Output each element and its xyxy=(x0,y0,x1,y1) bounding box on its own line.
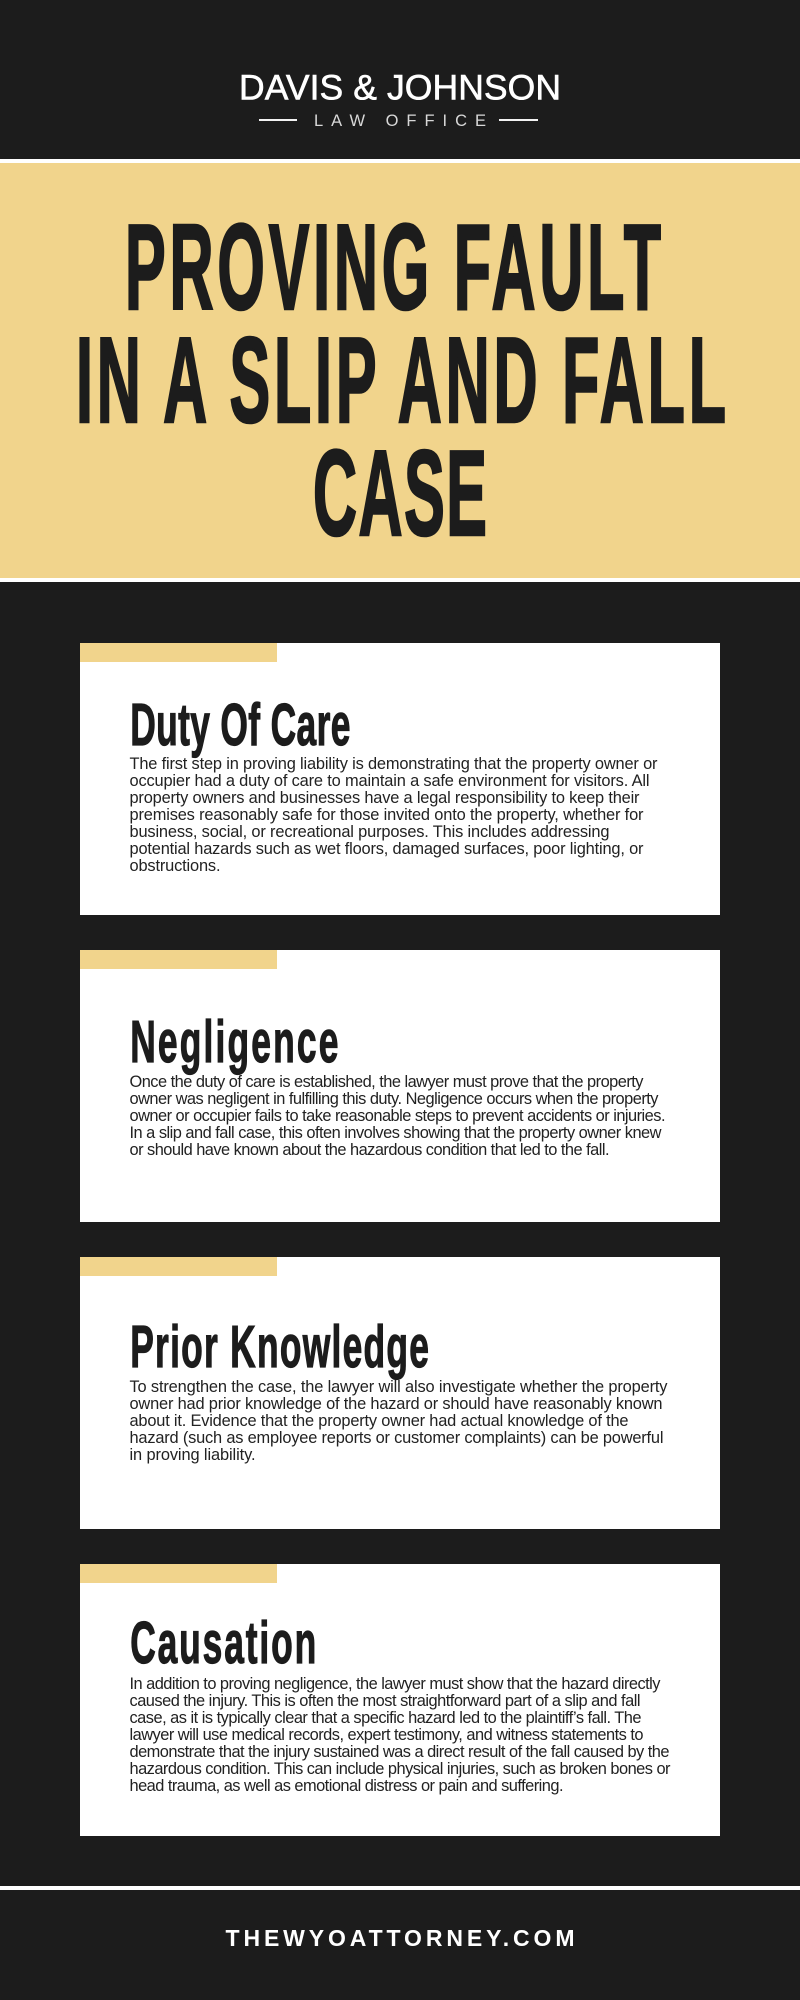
text: prior knowledge body: about it. Evidence that the property owner had actual knowledge of the xyxy=(130,1412,628,1430)
footer xyxy=(0,1886,800,1951)
heading: negligence: Negligence xyxy=(130,1010,338,1075)
text: duty of care body: The first step in proving liability is demonstrating that the property owner or xyxy=(130,755,658,773)
logo: Davis & Johnson Law Office: DAVIS & JOHNSON xyxy=(239,68,561,108)
logo: Davis & Johnson Law Office: LAW OFFICE xyxy=(314,112,486,130)
text: negligence body: owner or occupier fails to take reasonable steps to prevent accidents or injuries. xyxy=(130,1107,666,1125)
text: prior knowledge body: To strengthen the case, the lawyer will also investigate whether the property xyxy=(130,1378,668,1396)
title heading: IN A SLIP AND FALL xyxy=(76,313,726,449)
panel: negligence xyxy=(80,950,720,1222)
text: causation body: case, as it is typically clear that a specific hazard led to the plaintiff’s fall. The xyxy=(130,1709,642,1727)
text: causation body xyxy=(130,1675,671,1795)
text: causation body: demonstrate that the injury sustained was a direct result of the fall caused by the xyxy=(130,1743,670,1761)
text: duty of care body xyxy=(130,755,658,875)
title heading: PROVING FAULT xyxy=(125,200,661,336)
text: duty of care body: premises reasonably safe for those invited onto the property, whether for xyxy=(130,806,644,824)
text: prior knowledge body: owner had prior knowledge of the hazard or should have reasonably known xyxy=(130,1395,662,1413)
text: negligence body: owner was negligent in fulfilling this duty. Negligence occurs when the property xyxy=(130,1090,659,1108)
text: causation body: head trauma, as well as emotional distress or pain and suffering. xyxy=(130,1777,564,1795)
text: prior knowledge body xyxy=(130,1378,668,1464)
text: duty of care body: occupier had a duty of care to maintain a safe environment for visitors. All xyxy=(130,772,650,790)
title heading: CASE xyxy=(313,426,487,562)
text: negligence body: Once the duty of care is established, the lawyer must prove that the property xyxy=(130,1073,644,1091)
title band xyxy=(0,159,800,582)
text: prior knowledge body: hazard (such as employee reports or customer complaints) can be powerful xyxy=(130,1429,664,1447)
text: negligence body xyxy=(130,1073,666,1159)
heading: duty of care: Duty Of Care xyxy=(130,693,350,758)
logo: Davis & Johnson Law Office xyxy=(239,68,561,130)
text: causation body: caused the injury. This is often the most straightforward part of a slip and fall xyxy=(130,1692,640,1710)
text: duty of care body: obstructions. xyxy=(130,857,220,875)
panel: duty of care xyxy=(80,643,720,915)
text: causation body: In addition to proving negligence, the lawyer must show that the hazard directly xyxy=(130,1675,661,1693)
panel: causation xyxy=(80,1564,720,1836)
text: negligence body: In a slip and fall case, this often involves showing that the property owner knew xyxy=(130,1124,662,1142)
text: duty of care body: business, social, or recreational purposes. This includes addressing xyxy=(130,823,610,841)
text: duty of care body: property owners and businesses have a legal responsibility to keep their xyxy=(130,789,640,807)
text: negligence body: or should have known about the hazardous condition that led to the fall. xyxy=(130,1141,610,1159)
text: causation body: hazardous condition. This can include physical injuries, such as broken bones or xyxy=(130,1760,671,1778)
text: causation body: lawyer will use medical records, expert testimony, and witness statements to xyxy=(130,1726,644,1744)
panel: prior knowledge xyxy=(80,1257,720,1529)
text: prior knowledge body: in proving liability. xyxy=(130,1446,256,1464)
title heading xyxy=(76,200,726,562)
text: duty of care body: potential hazards such as wet floors, damaged surfaces, poor lighting, or xyxy=(130,840,644,858)
footer url: THEWYOATTORNEY.COM xyxy=(226,1925,574,1951)
heading: causation: Causation xyxy=(130,1611,316,1676)
heading: prior knowledge: Prior Knowledge xyxy=(130,1315,429,1380)
